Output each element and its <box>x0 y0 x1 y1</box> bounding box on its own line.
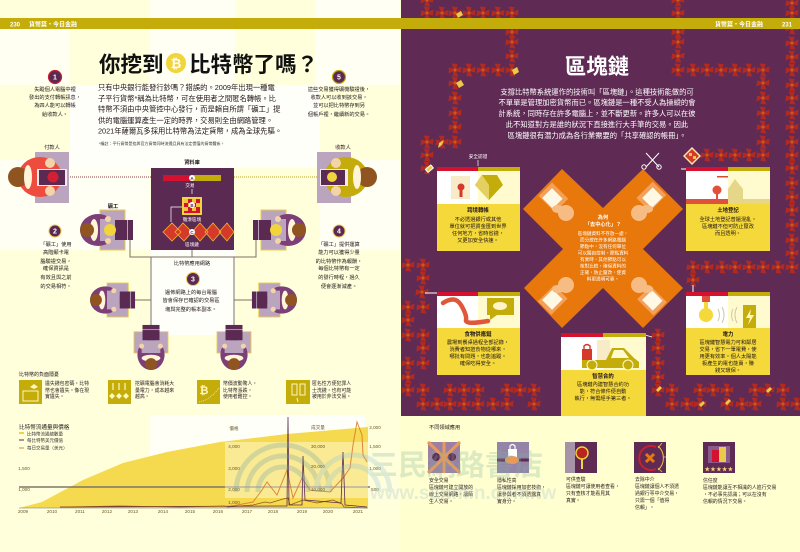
miner top right <box>253 210 306 250</box>
step 1: 失蹤個人電腦中裡 <box>34 85 76 93</box>
center text: 可以獨自控制。節點資料 <box>578 250 629 256</box>
footnote: *編註：平行貨幣是指與官方貨幣同時流通且具有法定價值的貨幣體系。 <box>99 140 225 146</box>
center text <box>578 213 629 282</box>
axis labels: 2013 <box>128 509 139 514</box>
watermark: www.sanmin.com.tw <box>369 483 556 504</box>
chain tags <box>425 165 693 337</box>
card: supply chain: 確保吃得安全。 <box>460 359 496 367</box>
application 4: decentralized: 只需一個「值得 <box>635 497 669 504</box>
dotted transaction lines <box>70 176 317 178</box>
database label: 資料庫 <box>184 158 200 166</box>
intro text: 特幣不須由中央管控中心發行，而是賴自所謂「礦工」提 <box>98 104 281 114</box>
database panel <box>151 168 234 250</box>
step 2: 有效且與之前 <box>40 273 72 281</box>
card: supply chain: 哪批有問題，也能追蹤。 <box>449 352 507 360</box>
title: 比特幣了嗎？ <box>189 53 318 77</box>
downside 3: 比特幣漲跌， <box>223 387 252 394</box>
application 2: privacy: 讓參與者不須透露真 <box>497 491 541 498</box>
application 3: traceability <box>565 442 620 504</box>
axis labels: 2011 <box>75 509 85 514</box>
miner top left <box>80 202 133 250</box>
step 3: 3 <box>191 276 195 284</box>
axis labels: 2,000 <box>228 487 240 492</box>
reference line <box>19 486 370 488</box>
center text: 核對比較，確保資料的 <box>580 262 626 270</box>
axis labels: 2014 <box>158 509 169 514</box>
database panel: 雜湊區塊 <box>183 216 202 223</box>
card: smart contract: 區塊鏈內建智慧合約功 <box>577 380 629 388</box>
axis labels: 2017 <box>242 509 253 514</box>
step 4: 「礦工」提供運算 <box>318 240 360 248</box>
icon: block diamond <box>684 148 700 164</box>
application 1: secure transactions: 線上交易網路，讓陌 <box>429 491 473 498</box>
card: patents <box>437 167 520 251</box>
pinwheel chain: lower left <box>402 258 540 410</box>
right page header bar: 貨幣篇・今日金融 <box>715 20 763 28</box>
supply area <box>19 427 368 508</box>
axis labels: 1,000 <box>18 487 30 492</box>
title <box>99 53 318 77</box>
application 2: privacy <box>497 442 546 505</box>
blockchain intro text: 支撐比特幣系統運作的技術叫「區塊鏈」。這種技術能做的可 <box>500 88 694 96</box>
application 5: trust: ，不必事先認識；可以在沒有 <box>703 491 767 498</box>
left page header bar: 230 <box>10 22 21 28</box>
card: smart contract: 執行，無需經手第三者。 <box>574 394 632 402</box>
miner bottom left <box>134 325 168 370</box>
baseline with ticks <box>60 506 225 507</box>
step 4: 的發行時程，過久 <box>318 273 361 281</box>
pinwheel chain: far right <box>686 0 798 286</box>
card callout label: 安全認證 <box>469 153 488 160</box>
pinwheel chain: lower right <box>652 328 800 410</box>
orange price line <box>227 422 367 507</box>
axis labels: 2019 <box>297 509 308 514</box>
axis labels: 成交量 <box>311 424 325 431</box>
step 3 <box>162 272 220 313</box>
right page header bar <box>400 18 800 29</box>
step 4: 4 <box>337 228 341 236</box>
application 3: traceability: 真實。 <box>566 497 581 504</box>
card: supply chain <box>437 292 520 375</box>
card: supply chain: 農場到餐桌過程全部記錄， <box>447 338 509 346</box>
database panel: A <box>190 176 194 181</box>
axis labels: 2009 <box>18 509 29 514</box>
axis labels: 1,000 <box>369 466 381 471</box>
step 2: 確保資訊是 <box>43 264 69 272</box>
axis labels: 2,000 <box>369 425 381 430</box>
axis labels: 30,000 <box>311 444 325 449</box>
receiver: 收款人 <box>335 143 351 151</box>
downside 3 <box>197 380 257 404</box>
applications heading: 不同領域應用 <box>429 423 460 431</box>
application 1: secure transactions: 區塊鏈可建立開放的 <box>429 484 473 491</box>
chart: 比特幣流通量與價格 <box>19 423 70 431</box>
step 4: 每個比特幣有一定 <box>318 264 360 272</box>
chart: 比特幣流通總數量 <box>27 430 63 438</box>
downside 4 <box>286 380 351 404</box>
blockchain intro text: 區塊鏈很有潛力成為各行業需要的「共享確認的帳冊」。 <box>508 131 686 140</box>
volume line <box>227 498 367 508</box>
left page background <box>0 0 400 552</box>
axis labels: 2018 <box>268 509 279 514</box>
axis labels: 2012 <box>102 509 113 514</box>
center text: 「去中心化」？ <box>585 220 621 228</box>
card: patents: 任何地方，省時省錢， <box>452 229 504 237</box>
axis labels <box>18 424 381 514</box>
center text: 正確，防止竄改，使資 <box>580 269 626 276</box>
application 1: secure transactions <box>428 442 473 505</box>
axis labels: 2021 <box>353 509 364 514</box>
application 5: trust: 信任度 <box>703 477 718 484</box>
step 2: 「礦工」使用 <box>40 240 72 248</box>
axis labels: 1,500 <box>18 466 30 471</box>
axis labels: 1,500 <box>369 444 381 449</box>
application 3: traceability: 區塊鏈可讓使用者查看， <box>566 483 620 490</box>
card: land registry: 而且透明。 <box>715 229 741 237</box>
blockchain title: 區塊鏈 <box>565 55 629 79</box>
card: smart contract <box>561 333 646 416</box>
chart: 每日交易量（美元） <box>27 444 68 452</box>
pinwheel chain: top right <box>672 0 770 162</box>
center text: 料更透明可靠。 <box>587 276 619 282</box>
blockchain intro text: 此不知道對方是誰的狀況下直接進行大手筆的交易。因此 <box>506 120 689 129</box>
application 2: privacy: 實身分。 <box>497 498 517 505</box>
payer: 付款人 <box>44 143 60 151</box>
blockchain intro text: 不單單是管理加密貨幣而已。區塊鏈是一種不受人為操縱的會 <box>498 98 696 107</box>
card: energy: 板產生的電也能賣，賺 <box>702 359 754 367</box>
miner bottom right <box>217 325 251 370</box>
application 5: trust <box>703 442 776 505</box>
downside 1: 遺失錢包密碼，比特 <box>45 380 89 387</box>
step 5: 這些交易獲得礦機驗證後， <box>308 85 370 93</box>
intro text <box>98 83 282 136</box>
downside 3: 使用者難控。 <box>223 393 252 400</box>
step 5 <box>308 70 370 118</box>
right page purple background <box>401 0 800 416</box>
center text: 為何 <box>598 213 609 221</box>
center text: 而分散在許多網路電腦 <box>580 236 626 244</box>
orange X panel <box>523 169 683 328</box>
application 4: decentralized: 區塊鏈讓個人不須透 <box>635 483 679 490</box>
corner illustration bottom left <box>538 277 574 315</box>
card: land registry: 土地登記 <box>717 206 739 214</box>
step 5: 5 <box>337 74 341 82</box>
card callout label <box>469 153 488 166</box>
card: energy: 用更有效率。個人太陽能 <box>699 352 757 360</box>
miner mid left <box>90 283 135 317</box>
downside 4: 匿名性方便犯罪人 <box>312 380 351 387</box>
right page header bar: 231 <box>782 22 793 28</box>
downside 1: 幣也會遺失。像在現 <box>45 387 89 394</box>
step 2: 的交易相符。 <box>40 282 72 290</box>
axis labels: 3,000 <box>228 466 240 471</box>
card: patents: 又更加安全快速。 <box>457 236 499 244</box>
card: patents: 跨境轉帳 <box>467 206 489 214</box>
downside 2: 挖礦電腦會消耗大 <box>135 380 174 387</box>
application 4: decentralized: 去除中介 <box>635 476 655 483</box>
corner illustration top right <box>631 182 666 221</box>
step 3: 塊與完整的帳本副本。 <box>165 305 217 313</box>
step 5: 收款人可以收到該交易， <box>310 93 368 101</box>
axis labels: 1,000 <box>228 500 240 505</box>
step 1: 發出的支付轉帳訊息， <box>29 93 81 101</box>
application 5: trust: 區塊鏈能讓互不相識的人進行交易 <box>703 484 776 491</box>
application 3: traceability: 可供查驗 <box>566 476 586 483</box>
center text: 節點中，沒有任何單位 <box>580 243 626 250</box>
network lines <box>130 240 256 328</box>
card: land registry <box>686 167 770 251</box>
center text: 區塊鏈資料不存放一處， <box>578 230 628 237</box>
application 4: decentralized <box>634 442 679 511</box>
step 1: 1 <box>53 74 57 82</box>
axis labels: 2010 <box>47 509 58 514</box>
step 1: 為四人能可以轉帳 <box>34 101 76 109</box>
downside 2: 越高。 <box>135 393 150 400</box>
downside 1: 實遺失。 <box>45 393 65 400</box>
card: energy: 錢又環保。 <box>715 366 741 374</box>
downside 2 <box>108 380 174 404</box>
purple spikes <box>60 417 367 507</box>
left page header bar: 貨幣篇・今日金融 <box>29 20 77 28</box>
intro text: 子平行貨幣*稱為比特幣，可在使用者之間匿名轉帳。比 <box>98 94 277 103</box>
axis labels: 4,000 <box>228 444 240 449</box>
application 2: privacy: 隱私性高 <box>497 477 517 484</box>
step 4: 便會逐漸減產。 <box>321 282 357 290</box>
card: energy <box>686 292 770 375</box>
card: land registry: 全球土地登記普遍混亂， <box>699 215 757 223</box>
application 2: privacy: 區塊鏈採用加密技術， <box>497 484 546 491</box>
step 2 <box>40 225 72 290</box>
step 4 <box>316 225 362 290</box>
right page lower background <box>400 416 800 552</box>
downside 2: 量電力，成本越來 <box>135 387 174 394</box>
application 3: traceability: 只有查核才能看見其 <box>566 490 610 497</box>
pale band over chart <box>225 442 368 498</box>
blockchain intro text: 計系統，同時存在許多電腦上，並不斷更新。許多人可以在彼 <box>498 109 696 118</box>
step 2: 腦驗證交易， <box>40 257 72 265</box>
application 5: trust: ★★★★★ <box>704 467 734 473</box>
title: ₿ <box>171 56 181 71</box>
step 1: 給收款人。 <box>42 110 68 118</box>
network caption: 比特幣應用網路 <box>174 259 211 267</box>
card: land registry: 區塊鏈不但可防止竄改 <box>702 222 755 230</box>
step 2: 2 <box>53 228 57 236</box>
card: smart contract: 能，符合條件便自動 <box>580 387 626 395</box>
step 5: 並可以把比特幣存到另 <box>313 101 365 109</box>
step 3: 遍佈網路上的每台電腦 <box>165 288 217 296</box>
center text: 有異時，其他節點可以 <box>580 256 626 263</box>
step 4: 的比特幣作為報酬， <box>316 257 362 265</box>
corner illustration bottom right <box>631 277 667 316</box>
title: 你挖到 <box>99 53 164 77</box>
receiver <box>317 143 377 203</box>
axis labels: 10,000 <box>311 487 325 492</box>
axis labels: 20,000 <box>311 464 325 469</box>
axis labels: 500 <box>371 487 379 492</box>
application 4: decentralized: 信賴」。 <box>635 504 655 511</box>
database panel: 交易 <box>185 182 195 189</box>
icon: scissors <box>642 153 661 169</box>
application 1: secure transactions: 安全交易 <box>429 477 449 484</box>
chart <box>18 417 381 514</box>
intro text: 2021年薩爾瓦多採用比特幣為法定貨幣，成為全球先驅。 <box>98 126 282 136</box>
application 5: trust: 信賴的情況下交易。 <box>703 498 747 505</box>
application 4: decentralized: 過銀行等中介交易， <box>635 490 679 497</box>
blockchain intro text <box>498 88 696 140</box>
watermark <box>236 445 556 504</box>
downsides heading: 比特幣的負面隱憂 <box>19 371 59 378</box>
miner top left: 礦工 <box>108 202 118 210</box>
application 1: secure transactions: 生人交易。 <box>429 498 453 505</box>
watermark: 三民網路書店 <box>369 449 543 482</box>
miner mid right <box>252 283 297 317</box>
left page header bar <box>0 18 400 29</box>
axis labels: 2016 <box>213 509 224 514</box>
corner illustration top left <box>539 182 574 221</box>
step 5: 個帳戶裡，繼續新的交易。 <box>308 110 370 118</box>
card: supply chain: 食物供應鏈 <box>465 330 492 338</box>
axis labels: 價格 <box>229 425 239 432</box>
database panel: B <box>190 203 194 208</box>
downside 3: 幣價波動驚人， <box>223 380 257 387</box>
downside 4: 被用於非法交易。 <box>312 393 351 400</box>
step 4: 能力可以獲得少量 <box>318 248 360 256</box>
downside 3: ₿ <box>200 385 209 397</box>
card: patents: 單位就可把資金匯到世界 <box>449 222 507 230</box>
card: energy: 區塊鏈智慧電力可和鄰居 <box>699 338 757 346</box>
intro text: 供的電腦運算產生一定的時界，交易則全由網路管理。 <box>98 116 273 125</box>
step 2: 高階顯卡電 <box>43 248 69 256</box>
payer <box>8 143 69 203</box>
card: energy: 電力 <box>723 330 733 338</box>
database panel: C <box>190 230 194 235</box>
pinwheel chain: top left <box>420 0 519 174</box>
axis labels: 2020 <box>323 509 334 514</box>
axis labels: 2015 <box>185 509 196 514</box>
step 3: 皆會保存已確認的交易區 <box>162 296 220 304</box>
chart: 每比特幣美元價值 <box>27 437 63 444</box>
card: patents: 不必透過銀行或其他 <box>455 215 501 223</box>
card: smart contract: 智慧合約 <box>592 372 614 380</box>
downside 4: 士洗錢，也有可能 <box>312 387 351 394</box>
card: supply chain: 消費者知道食物從哪來， <box>449 345 507 353</box>
downside 1 <box>19 380 89 404</box>
intro text: 只有中央銀行能發行鈔嗎？錯誤的。2009年出現一種電 <box>98 83 275 92</box>
card: energy: 交易，省下一筆電費，使 <box>699 345 757 353</box>
database panel: 區塊鏈 <box>185 241 199 248</box>
step 1 <box>29 70 81 118</box>
